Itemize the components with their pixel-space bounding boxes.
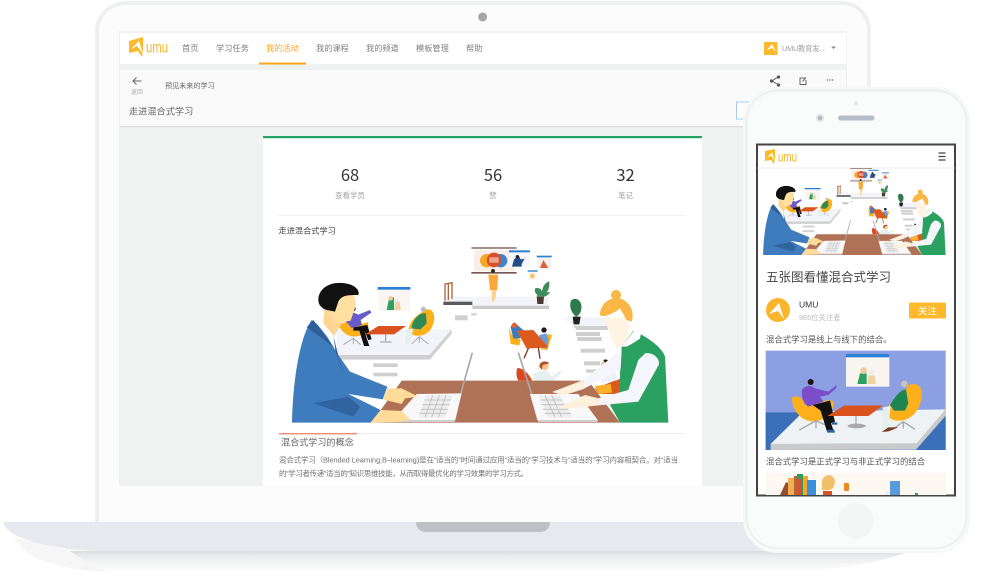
phone speaker bbox=[838, 116, 874, 120]
laptop camera bbox=[478, 12, 487, 22]
stat: likes bbox=[484, 162, 502, 200]
man at laptop bbox=[292, 283, 418, 423]
desk bbox=[372, 381, 620, 423]
more icon bbox=[827, 79, 833, 81]
author avatar bbox=[766, 298, 790, 322]
back arrow bbox=[131, 78, 143, 96]
phone screen bbox=[757, 144, 955, 496]
content card bbox=[263, 136, 702, 486]
activity header bbox=[120, 70, 846, 127]
phone sensor bbox=[854, 101, 858, 105]
follow button: 关注 bbox=[918, 306, 937, 318]
article title: 走进混合式学习 bbox=[278, 226, 336, 236]
account menu bbox=[764, 42, 836, 55]
author name: UMU bbox=[799, 300, 818, 310]
left armchair and person bbox=[792, 379, 837, 433]
logo bbox=[129, 37, 168, 57]
phone body bbox=[744, 88, 969, 552]
nav items bbox=[182, 43, 482, 53]
mobile article title: 五张图看懂混合式学习 bbox=[766, 270, 891, 284]
section paragraph: 混合式学习（Blended Learning,B–learning)是在“适当的”时间通过应用“适当的”学习技术与“适当的”学习内容相契合。对“适当 bbox=[279, 456, 678, 464]
active tab underline bbox=[259, 62, 306, 64]
nav items: 我的频道 bbox=[366, 43, 399, 53]
nav items: 我的课程 bbox=[316, 43, 349, 53]
lounge image bbox=[766, 351, 946, 450]
mobile header: umu bbox=[778, 148, 797, 164]
stat: notes bbox=[616, 162, 635, 200]
table bbox=[827, 405, 883, 428]
mobile header bbox=[758, 148, 954, 168]
stat: notes: 笔记 bbox=[618, 191, 633, 200]
nav items: 我的活动 bbox=[266, 43, 299, 53]
intro sentence: 混合式学习是线上与线下的结合。 bbox=[766, 334, 892, 344]
hamburger icon bbox=[938, 153, 946, 160]
phone camera bbox=[816, 114, 824, 122]
stat: likes: 赞 bbox=[489, 191, 497, 200]
mobile illustration bbox=[763, 168, 946, 255]
projector stage bbox=[443, 247, 552, 320]
phone bbox=[744, 88, 969, 552]
activity title: 走进混合式学习 bbox=[129, 106, 193, 116]
back arrow: 返回 bbox=[131, 89, 143, 96]
woman at laptop bbox=[552, 290, 668, 423]
top navigation bar bbox=[120, 33, 846, 64]
seated colleague bbox=[595, 360, 622, 394]
follow button bbox=[909, 302, 946, 318]
stat: likes: 56 bbox=[484, 162, 502, 186]
laptop body bbox=[97, 3, 869, 526]
section paragraph: 的“学习者传递”适当的”知识思维技能，从而取得最优化的学习效果的学习方式。 bbox=[279, 469, 528, 478]
logo: umu bbox=[146, 40, 168, 56]
follower count: 985位关注者 bbox=[799, 313, 840, 322]
stat: viewers: 68 bbox=[341, 162, 359, 186]
section divider bbox=[278, 433, 686, 434]
stat: viewers bbox=[335, 162, 365, 200]
laptop base bbox=[3, 522, 905, 572]
meeting group bbox=[509, 323, 562, 381]
laptop notch bbox=[416, 522, 550, 532]
laptop screen bbox=[119, 31, 847, 486]
stat: viewers: 查看学员 bbox=[335, 191, 365, 200]
stat: notes: 32 bbox=[616, 162, 635, 186]
nav items: 首页 bbox=[182, 43, 198, 53]
account menu: UMU教育发... bbox=[782, 44, 825, 53]
outlined button bbox=[736, 102, 756, 119]
lounge platform bbox=[337, 287, 452, 376]
second caption: 混合式学习是正式学习与非正式学习的结合 bbox=[766, 456, 926, 466]
share icon bbox=[770, 76, 780, 86]
section heading: 混合式学习的概念 bbox=[281, 436, 354, 448]
section paragraph bbox=[279, 456, 678, 478]
left laptop bbox=[393, 353, 472, 422]
illustration: blended learning office bbox=[292, 247, 668, 423]
home button bbox=[838, 503, 874, 539]
right platform bbox=[563, 299, 610, 373]
right laptop bbox=[518, 353, 598, 422]
nav items: 帮助 bbox=[466, 43, 482, 53]
wall screen bbox=[846, 354, 889, 387]
breadcrumb: 预见未来的学习 bbox=[165, 81, 215, 90]
books image bbox=[766, 473, 946, 495]
nav items: 模板管理 bbox=[416, 43, 449, 53]
right armchair and person bbox=[882, 381, 922, 432]
nav items: 学习任务 bbox=[216, 43, 249, 53]
edit icon bbox=[800, 78, 806, 84]
